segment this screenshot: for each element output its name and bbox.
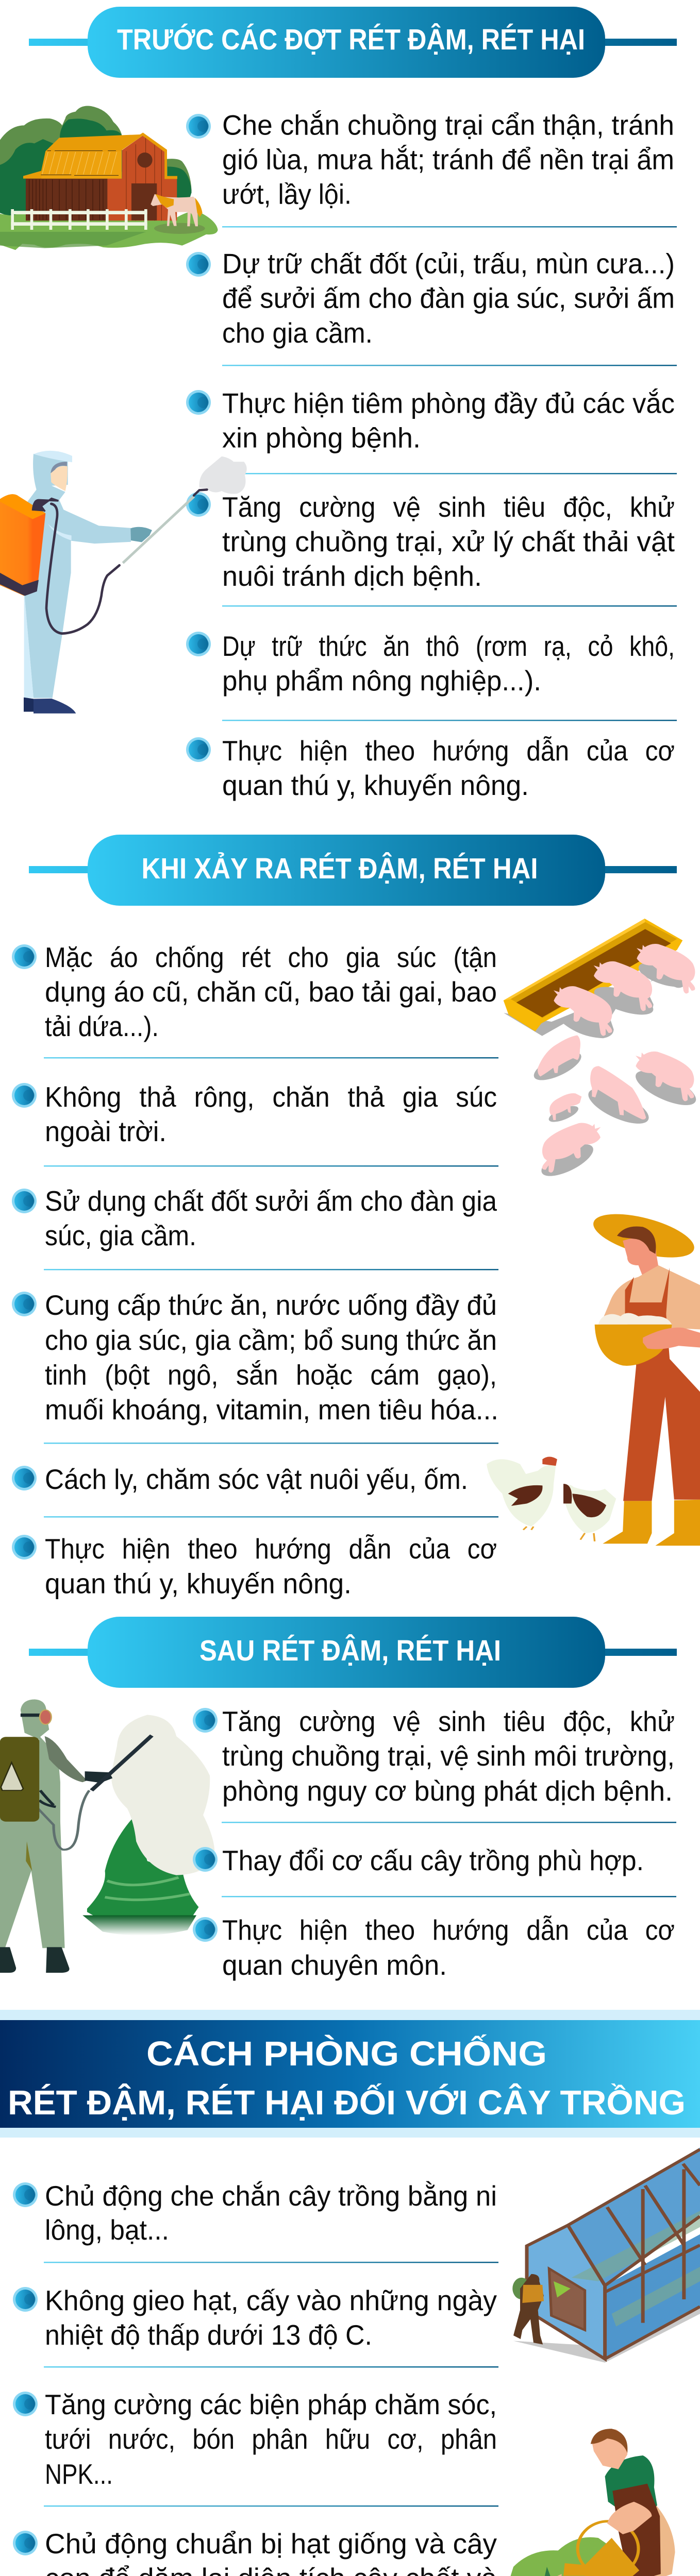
item 3: quan chuyên môn. [222, 1949, 447, 1981]
heading: TRƯỚC CÁC ĐỢT RÉT ĐẬM, RÉT HẠI: TRƯỚC CÁC ĐỢT RÉT ĐẬM, RÉT HẠI [117, 23, 585, 56]
item 4 [13, 2528, 497, 2576]
item 1 [13, 2180, 497, 2246]
item 4: tinh (bột ngô, sắn hoặc cám gạo), [45, 1359, 497, 1391]
item 5: Cách ly, chăm sóc vật nuôi yếu, ốm. [45, 1463, 468, 1495]
item 3: Sử dụng chất đốt sưởi ấm cho đàn gia [45, 1185, 497, 1217]
banner: crops section title [0, 2010, 700, 2138]
item 2: để sưởi ấm cho đàn gia súc, sưởi ấm [222, 282, 675, 314]
list: after cold spells [193, 1705, 676, 1981]
item 2: Dự trữ chất đốt (củi, trấu, mùn cưa...) [222, 247, 675, 279]
heading: TRƯỚC CÁC ĐỢT RÉT ĐẬM, RÉT HẠI [29, 7, 677, 78]
item 3: NPK... [45, 2458, 113, 2490]
item 1 [186, 109, 674, 210]
icon: worker in protective suit spraying [0, 451, 247, 714]
item 2 [13, 2284, 497, 2351]
section: after cold spells [0, 1617, 677, 1981]
item 3 [186, 387, 675, 453]
item 1: Che chắn chuồng trại cẩn thận, tránh [222, 109, 674, 141]
item 3 [193, 1914, 675, 1981]
item 1 [193, 1705, 675, 1807]
item 5 [186, 630, 675, 697]
item 1: dụng áo cũ, chăn cũ, bao tải gai, bao [45, 976, 497, 1008]
item 3 [13, 2388, 497, 2490]
icon: woman watering plants [495, 2429, 700, 2576]
item 1: ướt, lầy lội. [222, 178, 352, 210]
item 1 [12, 941, 497, 1042]
list: during cold spells [12, 941, 498, 1599]
item 6: quan thú y, khuyến nông. [222, 769, 529, 801]
list: before cold spells [186, 109, 677, 801]
banner: crops section title: RÉT ĐẬM, RÉT HẠI ĐỐI VỚI CÂY TRỒNG [8, 2083, 686, 2122]
icon: brown hen [563, 1484, 616, 1541]
section: during cold spells [12, 835, 700, 1599]
heading: KHI XẢY RA RÉT ĐẬM, RÉT HẠI [29, 835, 677, 906]
item 2: nhiệt độ thấp dưới 13 độ C. [45, 2319, 372, 2351]
icon: greenhouse with gardener [512, 2147, 700, 2363]
icon: pigs at feeding trough [504, 919, 700, 1182]
item 2: Thay đổi cơ cấu cây trồng phù hợp. [222, 1844, 644, 1876]
item 3: súc, gia cầm. [45, 1219, 196, 1251]
item 3: xin phòng bệnh. [222, 421, 421, 453]
heading: SAU RÉT ĐẬM, RÉT HẠI [29, 1617, 677, 1688]
item 1: Mặc áo chống rét cho gia súc (tận [45, 941, 497, 973]
item 4 [186, 491, 675, 592]
item 2: Không gieo hạt, cấy vào những ngày [45, 2284, 497, 2316]
icon: barn with horse [0, 106, 218, 250]
icon: farmer with eggs and chickens [487, 1205, 700, 1546]
item 4: muối khoáng, vitamin, men tiêu hóa... [45, 1394, 498, 1426]
item 1: Chủ động che chắn cây trồng bằng ni [45, 2180, 497, 2212]
item 6: quan thú y, khuyến nông. [45, 1567, 352, 1599]
item 2 [12, 1081, 497, 1147]
item 2: Không thả rông, chăn thả gia súc [45, 1081, 497, 1113]
item 4: cho gia súc, gia cầm; bổ sung thức ăn [45, 1324, 497, 1356]
item 2: cho gia cầm. [222, 317, 373, 349]
item 5: phụ phẩm nông nghiệp...). [222, 665, 541, 697]
item 1: lông, bạt... [45, 2214, 169, 2246]
item 2: ngoài trời. [45, 1115, 166, 1147]
heading: KHI XẢY RA RÉT ĐẬM, RÉT HẠI: KHI XẢY RA RÉT ĐẬM, RÉT HẠI [141, 852, 538, 885]
item 4: Chủ động chuẩn bị hạt giống và cây [45, 2528, 497, 2560]
list: crops [13, 2180, 498, 2576]
item 1: gió lùa, mưa hắt; tránh để nền trại ẩm [222, 143, 674, 175]
item 4 [12, 1289, 498, 1426]
item 6 [186, 735, 675, 801]
item 4: nuôi tránh dịch bệnh. [222, 560, 482, 592]
item 2 [186, 247, 675, 349]
item 1: tải dứa...). [45, 1010, 159, 1042]
section: before cold spells [0, 7, 677, 801]
banner: crops section title: CÁCH PHÒNG CHỐNG [146, 2034, 547, 2073]
item 1: phòng nguy cơ bùng phát dịch bệnh. [222, 1775, 673, 1807]
item 3: Tăng cường các biện pháp chăm sóc, [45, 2388, 497, 2420]
item 1: trùng chuồng trại, vệ sinh môi trường, [222, 1740, 675, 1772]
item 3: tưới nước, bón phân hữu cơ, phân [45, 2423, 497, 2455]
icon: disinfection worker and green waste bag [0, 1699, 214, 1973]
item 3: Thực hiện tiêm phòng đầy đủ các vắc [222, 387, 675, 419]
item 6: Thực hiện theo hướng dẫn của cơ [45, 1533, 497, 1565]
item 3 [12, 1185, 497, 1251]
item 4: trùng chuồng trại, xử lý chất thải vật [222, 526, 675, 557]
icon: white rooster [487, 1457, 557, 1530]
item 4: Cung cấp thức ăn, nước uống đầy đủ [45, 1289, 497, 1321]
heading: SAU RÉT ĐẬM, RÉT HẠI: SAU RÉT ĐẬM, RÉT HẠI [199, 1634, 501, 1667]
section: crops [13, 2147, 700, 2576]
item 6 [12, 1533, 497, 1599]
